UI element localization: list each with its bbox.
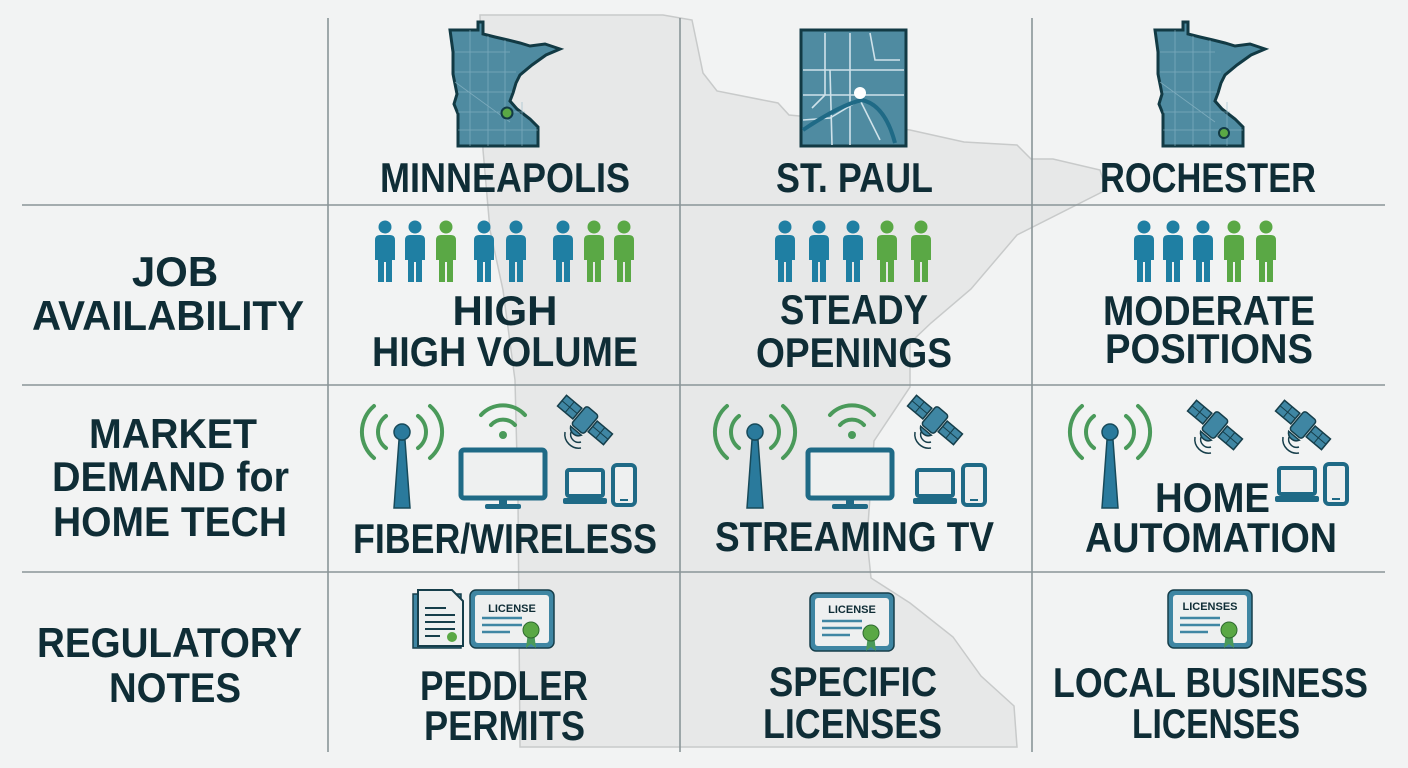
icon: tower (362, 406, 442, 508)
cell: St. Paul regulatory (763, 593, 942, 747)
row label: Market Demand (52, 410, 289, 545)
icon: people row (1134, 220, 1276, 282)
cell: Rochester jobs: MODERATE (1103, 287, 1315, 334)
icon: document and license (413, 590, 554, 648)
row label: Regulatory Notes: NOTES (109, 664, 241, 711)
icon: satellite and devices (550, 392, 635, 505)
icon: license certificate: LICENSE (828, 604, 876, 616)
row label: Job Availability (32, 248, 304, 339)
cell: St. Paul regulatory: SPECIFIC (769, 658, 937, 705)
city name St. Paul: ST. PAUL (776, 154, 933, 201)
cell: Minneapolis jobs: HIGH (452, 287, 558, 334)
cell: St. Paul market: STREAMING TV (715, 513, 994, 560)
cell: Rochester market: AUTOMATION (1085, 514, 1337, 561)
icon: people row (775, 220, 931, 282)
cell: St. Paul jobs: STEADY (780, 286, 928, 333)
header: Rochester (1100, 22, 1316, 201)
cell: Minneapolis jobs (372, 220, 638, 375)
cell: St. Paul jobs (756, 220, 952, 376)
icon: tower (715, 406, 795, 508)
row label: Regulatory Notes (37, 619, 302, 711)
cell: Rochester jobs: POSITIONS (1105, 325, 1313, 372)
background silhouette: Minnesota (480, 15, 1106, 747)
icon: license certificate (810, 593, 894, 651)
cell: Minneapolis regulatory (413, 590, 588, 749)
cell: Minneapolis regulatory: PEDDLER (420, 662, 588, 709)
cell: Minneapolis jobs: HIGH VOLUME (372, 328, 638, 375)
cell: Rochester regulatory (1053, 590, 1368, 747)
cell: Rochester market: HOME (1155, 474, 1270, 521)
header: St. Paul (776, 30, 933, 201)
icon: tower (1070, 406, 1150, 508)
row label: Job Availability: AVAILABILITY (32, 292, 304, 339)
cell: Rochester market (1070, 397, 1347, 561)
row label: Market Demand: MARKET (89, 410, 257, 457)
cell: Minneapolis market: FIBER/WIRELESS (353, 515, 657, 562)
cell: Minneapolis market (353, 392, 657, 562)
icon: satellites and devices (1180, 397, 1347, 504)
cell: Rochester jobs (1103, 220, 1315, 372)
icon: people row (375, 220, 634, 282)
icon: tv with wifi (808, 405, 892, 509)
city name Minneapolis: MINNEAPOLIS (380, 154, 630, 201)
cell: St. Paul regulatory: LICENSES (763, 700, 942, 747)
row label: Regulatory Notes: REGULATORY (37, 619, 302, 666)
row label: Job Availability: JOB (132, 248, 218, 295)
row label: Market Demand: DEMAND for (52, 453, 289, 500)
header: Minneapolis (380, 22, 630, 201)
city name Rochester: ROCHESTER (1100, 154, 1316, 201)
icon: satellite and devices (900, 392, 985, 505)
cell: Rochester regulatory: LICENSES (1132, 700, 1300, 747)
row label: Market Demand: HOME TECH (53, 498, 287, 545)
icon: license certificate: LICENSES (1182, 601, 1238, 613)
icon: St. Paul street map (801, 30, 906, 146)
icon: license certificate (1168, 590, 1252, 648)
cell: St. Paul jobs: OPENINGS (756, 329, 952, 376)
icon: Minnesota map with Rochester dot (1155, 22, 1265, 146)
icon: tv with wifi (461, 405, 545, 509)
icon: Minnesota map with Minneapolis dot (450, 22, 560, 146)
cell: Minneapolis regulatory: PERMITS (424, 702, 585, 749)
icon: document and license: LICENSE (488, 603, 536, 615)
cell: St. Paul market (715, 392, 994, 560)
